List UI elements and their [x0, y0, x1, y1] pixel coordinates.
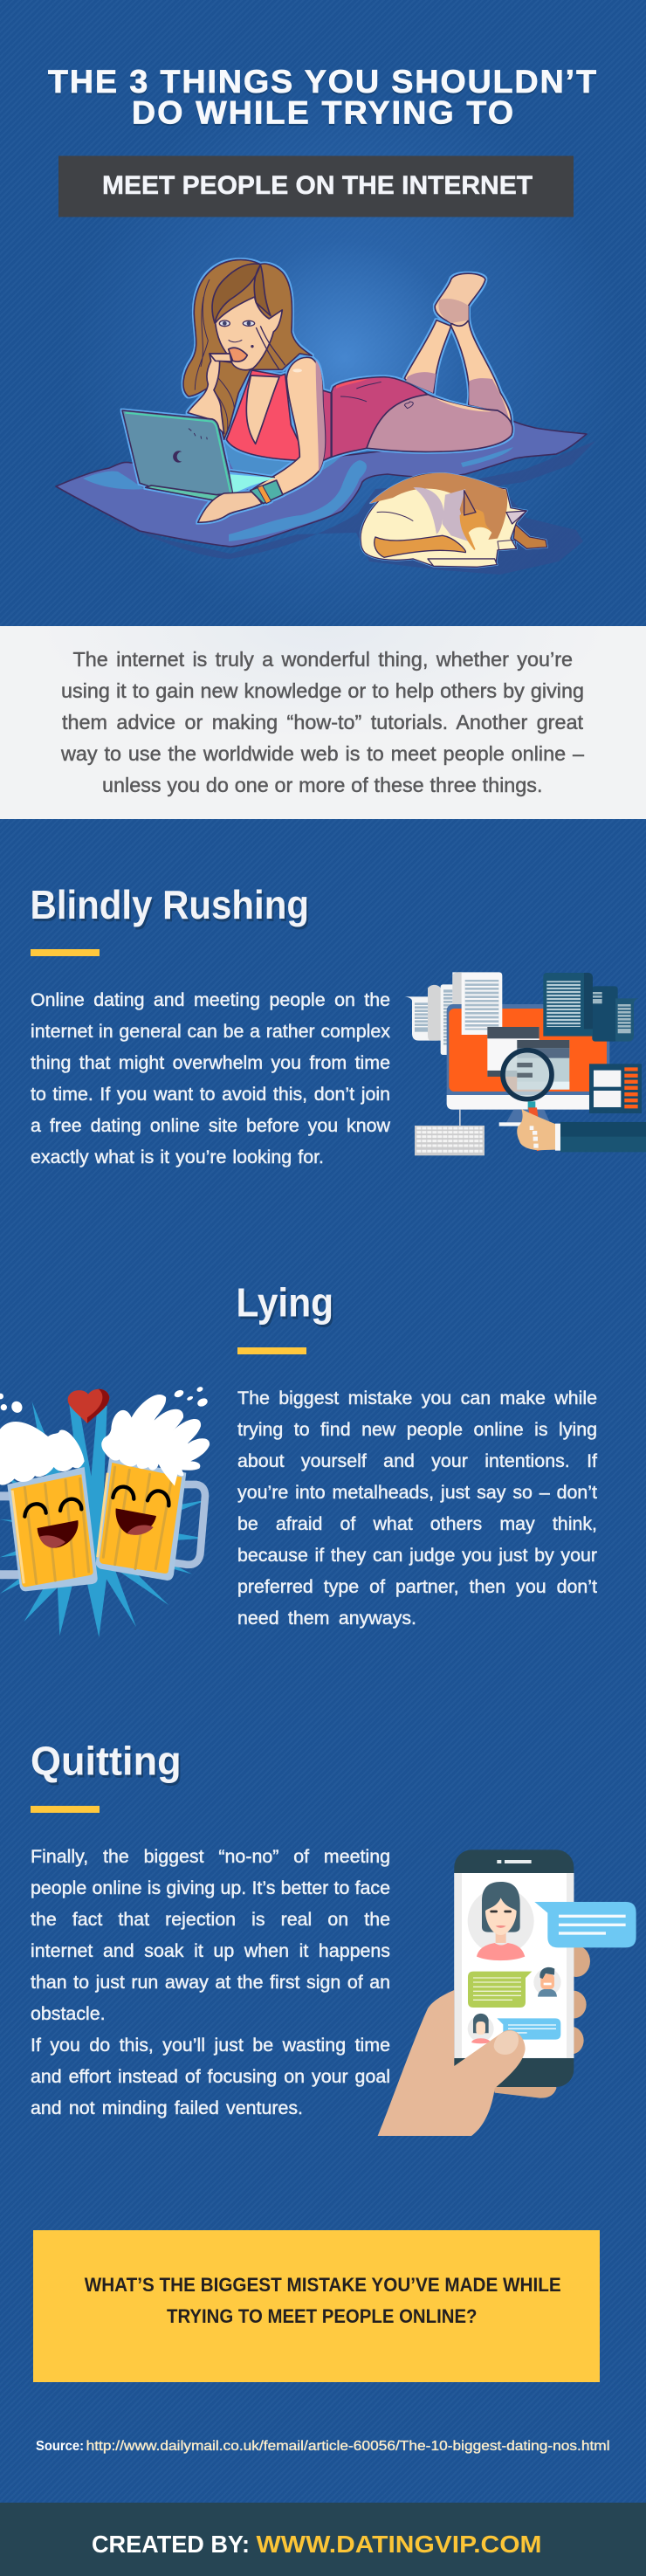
footer: [0, 2503, 646, 2576]
text block: Lying: be afraid of what others may think,: [237, 1512, 597, 1533]
right mug: [96, 1458, 205, 1581]
intro text block: using it to gain new knowledge or to help others by giving: [61, 679, 584, 702]
text block: Lying: need them anyways.: [237, 1607, 416, 1628]
intro text block: way to use the worldwide web is to meet people online –: [61, 742, 584, 765]
text block: Lying: The biggest mistake you can make while: [237, 1387, 597, 1408]
phone: [454, 1849, 574, 2087]
accent bar: [31, 1806, 100, 1813]
heading: Quitting: Quitting: [31, 1739, 182, 1784]
torso head and arms: [122, 259, 332, 522]
blanket highlights: [83, 438, 513, 541]
callout: closing question: [33, 2230, 600, 2382]
back fingers: [491, 1946, 590, 2098]
text block: Blindly Rushing: Online dating and meeting people on the: [31, 989, 390, 1010]
intro text block: The internet is truly a wonderful thing, whether you’re: [73, 648, 573, 671]
accent bar: [237, 1347, 306, 1354]
legs and dress: [325, 273, 512, 460]
magnifier: [503, 1050, 552, 1151]
footer: WWW.DATINGVIP.COM: [257, 2531, 541, 2558]
subtitle banner: MEET PEOPLE ON THE INTERNET: [102, 171, 533, 200]
laptop: [122, 410, 233, 500]
source line: Source:: [36, 2439, 84, 2454]
left mug: [0, 1467, 98, 1591]
cat: [361, 473, 547, 567]
intro text block: unless you do one or more of these three things.: [102, 774, 543, 796]
ground shadow: [96, 441, 595, 575]
side panel: [589, 1064, 642, 1113]
woman: [122, 259, 512, 522]
rays: [0, 1402, 208, 1637]
page on screen: [452, 972, 502, 1035]
title: DO WHILE TRYING TO: [132, 94, 513, 131]
small male avatar: [533, 1967, 561, 1997]
hero illustration: woman with laptop and cat: [56, 259, 595, 575]
text block: Quitting: people online is giving up. It’s better to face: [31, 1877, 390, 1898]
text block: Blindly Rushing: internet in general can be a rather complex: [31, 1021, 390, 1042]
text block: Quitting: and effort instead of focusing on your goal: [31, 2066, 390, 2087]
callout: closing question: WHAT’S THE BIGGEST MISTAKE YOU’VE MADE WHILE: [85, 2274, 561, 2296]
text block: Quitting: If you do this, you’ll just be wasting time: [31, 2035, 390, 2056]
heading: Lying: Lying: [236, 1280, 333, 1326]
text block: Lying: about yourself and your intentions. If: [237, 1450, 597, 1471]
text block: Blindly Rushing: a free dating online site before you know: [31, 1115, 390, 1136]
text block: Quitting: than to just run away at the first sign of an: [31, 1972, 390, 1993]
intro text block: [61, 648, 585, 796]
front hand: [378, 1990, 526, 2136]
windows: [487, 1027, 569, 1090]
papers left: [404, 984, 464, 1055]
foam: [0, 1386, 210, 1486]
text block: Blindly Rushing: exactly what is it you’re looking for.: [31, 1147, 324, 1167]
text block: Blindly Rushing: to time. If you want to avoid this, don’t join: [31, 1084, 390, 1105]
blanket: [56, 420, 587, 547]
text block: Blindly Rushing: [31, 989, 391, 1167]
hand and sleeve: [499, 1109, 646, 1152]
title: [48, 63, 596, 131]
footer: CREATED BY:: [92, 2531, 250, 2558]
small female avatar and bubble: [468, 2014, 560, 2043]
illustration: hand holding phone with chat: [378, 1849, 636, 2136]
text block: Quitting: and not minding failed ventures.: [31, 2097, 303, 2118]
text block: Quitting: Finally, the biggest “no-no” of meeting: [31, 1846, 390, 1867]
intro text block: them advice or making “how-to” tutorials. Another great: [62, 711, 583, 734]
text block: Lying: [237, 1387, 597, 1629]
text block: Lying: because if they can judge you just by your: [237, 1544, 597, 1565]
source line: http://www.dailymail.co.uk/femail/article-60056/The-10-biggest-dating-nos.html: [86, 2439, 610, 2454]
accent bar: [31, 949, 100, 956]
text block: Lying: preferred type of partner, then you don’t: [237, 1575, 597, 1596]
illustration: computer and magnifier: [404, 972, 646, 1155]
hair strands: [195, 279, 234, 434]
green chat bubble: [468, 1972, 532, 2008]
dark documents: [543, 973, 639, 1042]
callout: closing question: TRYING TO MEET PEOPLE ONLINE?: [167, 2305, 477, 2327]
illustration: beer mugs toasting: [0, 1386, 210, 1637]
blue chat bubble: [534, 1902, 636, 1947]
text block: Blindly Rushing: thing that might overwhelm you from time: [31, 1052, 390, 1073]
keyboard: [415, 1126, 484, 1155]
monitor: [447, 1004, 609, 1127]
hand and bracelet: [198, 492, 262, 522]
text block: Quitting: [31, 1846, 390, 2118]
text block: Quitting: internet and soak it up when it happens: [31, 1940, 390, 1961]
text block: Lying: you’re into metalheads, just say so – don’t: [237, 1481, 597, 1502]
heading: Blindly Rushing: Blindly Rushing: [30, 882, 309, 927]
large avatar: [468, 1882, 534, 1960]
text block: Lying: trying to find new people online is lying: [237, 1418, 597, 1439]
title: THE 3 THINGS YOU SHOULDN’T: [48, 63, 596, 100]
heart: [68, 1389, 109, 1423]
text block: Quitting: the fact that rejection is real on the: [31, 1909, 390, 1930]
text block: Quitting: obstacle.: [31, 2003, 106, 2024]
subtitle banner: [58, 155, 574, 217]
